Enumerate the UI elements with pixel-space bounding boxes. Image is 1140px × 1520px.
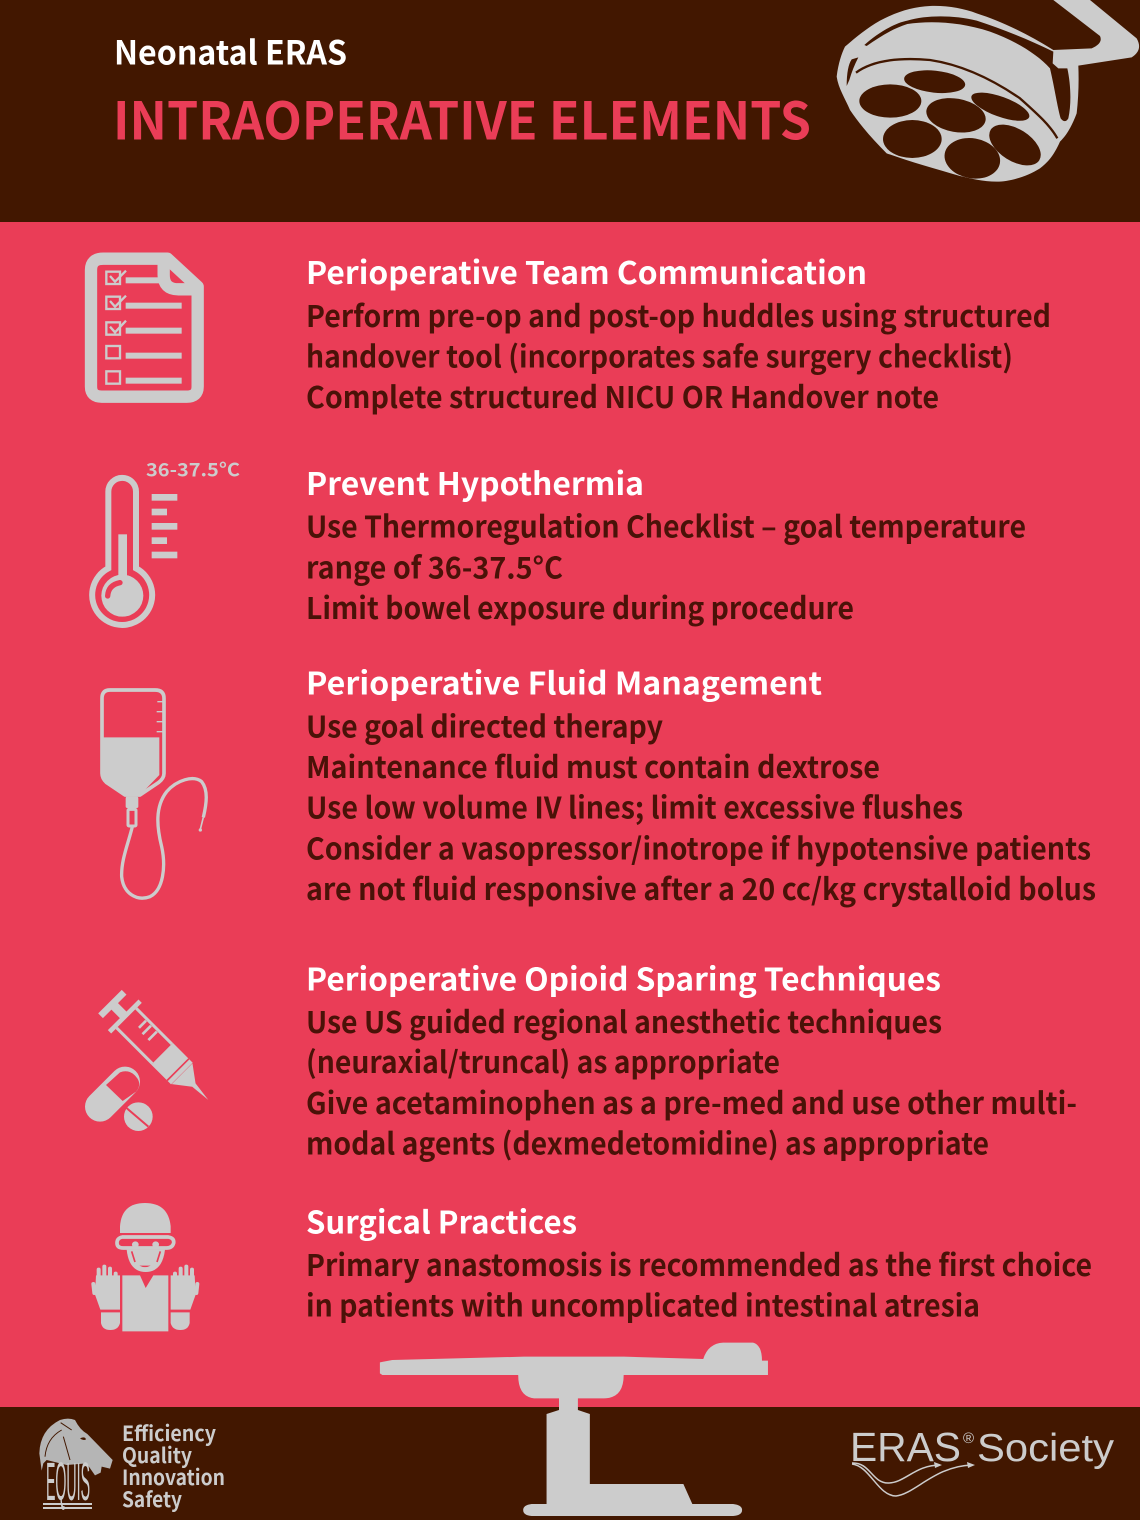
- tagline: efficiency quality innovation safety: Efficiency: [122, 1418, 216, 1448]
- section: Perioperative Opioid Sparing Techniques: Perioperative Opioid Sparing Techniques: [306, 954, 941, 999]
- section: Prevent Hypothermia: Limit bowel exposure during procedure: [306, 584, 854, 628]
- section: Prevent Hypothermia: [306, 459, 1026, 628]
- tagline: efficiency quality innovation safety: Quality: [122, 1440, 192, 1470]
- section: Perioperative Fluid Management: Perioperative Fluid Management: [306, 658, 822, 703]
- section: Prevent Hypothermia: Prevent Hypothermia: [306, 459, 644, 504]
- temperature label: 36-37.5°C: [146, 456, 240, 482]
- left glove: [93, 1267, 120, 1330]
- logo: ERAS Society: Society: [977, 1427, 1115, 1470]
- section: Surgical Practices: Surgical Practices: [306, 1197, 577, 1242]
- section: Perioperative Team Communication: Perform pre-op and post-op huddles using structured: [306, 292, 1051, 336]
- tagline: efficiency quality innovation safety: [122, 1418, 225, 1514]
- section: Perioperative Fluid Management: [306, 658, 1096, 909]
- icon: surgeon: [93, 1203, 197, 1331]
- footer band: [0, 1407, 1140, 1520]
- section: Surgical Practices: Primary anastomosis is recommended as the first choice: [306, 1241, 1092, 1285]
- capsule: [100, 1082, 125, 1107]
- section: Perioperative Team Communication: [306, 248, 1051, 417]
- icon: checklist document: [91, 259, 198, 397]
- section: Perioperative Opioid Sparing Techniques: [306, 954, 1077, 1164]
- section: Perioperative Fluid Management: Use goal directed therapy: [306, 702, 663, 746]
- tablet: [124, 1102, 153, 1131]
- horse head: [39, 1419, 113, 1475]
- tagline: efficiency quality innovation safety: Safety: [122, 1484, 182, 1514]
- title: INTRAOPERATIVE ELEMENTS: [113, 80, 811, 154]
- section: Perioperative Team Communication: Complete structured NICU OR Handover note: [306, 373, 939, 417]
- section: Perioperative Opioid Sparing Techniques: (neuraxial/truncal) as appropriate: [306, 1038, 780, 1082]
- section: Perioperative Team Communication: Perioperative Team Communication: [306, 248, 867, 293]
- section: Perioperative Fluid Management: are not fluid responsive after a 20 cc/kg crystalloid bolus: [306, 865, 1096, 909]
- header band: [0, 0, 1140, 222]
- section: Perioperative Opioid Sparing Techniques: Use US guided regional anesthetic techniques: [306, 998, 942, 1042]
- syringe: [95, 986, 224, 1115]
- icon: IV fluid bag: [102, 690, 206, 898]
- icon: surgical lamp: [837, 0, 1139, 183]
- section: Perioperative Fluid Management: Maintenance fluid must contain dextrose: [306, 743, 880, 787]
- section: Perioperative Team Communication: handover tool (incorporates safe surgery checklist): [306, 332, 1013, 376]
- icon: syringe and pills: [95, 986, 224, 1131]
- logo: ERAS Society: ®: [963, 1430, 974, 1447]
- icon: thermometer: [92, 478, 177, 625]
- icon: operating table: [380, 1343, 768, 1516]
- text: EQUIS: [46, 1452, 90, 1512]
- logo: ERAS Society: ERAS: [850, 1424, 961, 1470]
- logo: EQUIS: [39, 1419, 113, 1512]
- tagline: efficiency quality innovation safety: Innovation: [122, 1462, 225, 1492]
- logo: ERAS Society: [850, 1424, 1115, 1496]
- section: Perioperative Fluid Management: Use low volume IV lines; limit excessive flushes: [306, 784, 963, 828]
- section: Prevent Hypothermia: Use Thermoregulation Checklist – goal temperature: [306, 502, 1026, 546]
- section: Surgical Practices: in patients with uncomplicated intestinal atresia: [306, 1282, 980, 1326]
- section: Surgical Practices: [306, 1197, 1092, 1326]
- section: Perioperative Opioid Sparing Techniques: modal agents (dexmedetomidine) as appropriate: [306, 1120, 989, 1164]
- section: Perioperative Opioid Sparing Techniques: Give acetaminophen as a pre-med and use other multi-: [306, 1079, 1077, 1123]
- subtitle: Neonatal ERAS: [114, 26, 347, 74]
- right glove: [171, 1267, 197, 1330]
- section: Perioperative Fluid Management: Consider a vasopressor/inotrope if hypotensive patients: [306, 824, 1091, 868]
- section: Prevent Hypothermia: range of 36-37.5°C: [306, 544, 563, 588]
